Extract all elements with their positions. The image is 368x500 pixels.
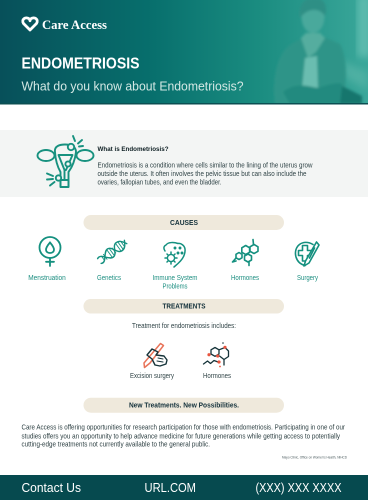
- icon: venus with drop: [40, 237, 60, 266]
- icon: uterus: [38, 136, 94, 187]
- logo: Care Access: Care Access: [42, 18, 107, 32]
- cause: surgery: [295, 242, 319, 282]
- closing paragraph: cutting-edge treatments not currently available to the general public.: [22, 441, 210, 449]
- contact label: Contact Us: [22, 481, 81, 495]
- causes heading pill: [84, 215, 284, 230]
- treatment: hormones: [203, 342, 231, 380]
- description: outside the uterus. It often involves the pelvic tissue but can also include the: [98, 170, 307, 178]
- cause: immune system problems: Immune System: [152, 275, 198, 282]
- cause: menstruation: [28, 237, 66, 282]
- photo: woman holding abdomen: [274, 0, 368, 104]
- cause: immune system problems: Problems: [162, 284, 188, 290]
- icon: hand holding scalpel: [144, 344, 167, 368]
- description: Endometriosis is a condition where cells similar to the lining of the uterus grow: [98, 162, 313, 170]
- icon: heart: [23, 18, 37, 30]
- url: URL.COM: [144, 481, 196, 495]
- treatments intro: Treatment for endometriosis includes:: [132, 322, 236, 330]
- treatment: excision surgery: [130, 344, 174, 380]
- closing paragraph: [22, 424, 346, 449]
- cause: surgery: Surgery: [297, 275, 318, 282]
- causes heading pill: CAUSES: [170, 220, 198, 227]
- title: ENDOMETRIOSIS: [22, 56, 140, 72]
- cause: hormones: [231, 240, 259, 282]
- panel: what is endometriosis: [0, 130, 368, 197]
- icon: molecule: [232, 240, 258, 266]
- footer: [0, 475, 368, 500]
- subtitle: What do you know about Endometriosis?: [22, 78, 244, 94]
- treatments heading pill: [84, 299, 284, 314]
- treatment: hormones: Hormones: [203, 373, 231, 380]
- cause: hormones: Hormones: [231, 275, 259, 282]
- icon: molecule with red dots: [204, 342, 228, 367]
- cause: menstruation: Menstruation: [28, 275, 66, 282]
- new treatments banner pill: New Treatments. New Possibilities.: [129, 401, 239, 410]
- icon: shield with virus: [164, 243, 185, 267]
- icon: dna helix: [96, 238, 129, 265]
- source note: Mayo Clinic, Office on Women's Health, NIHCD: [282, 456, 347, 460]
- icon: cross with scalpel: [295, 242, 319, 266]
- treatment: excision surgery: Excision surgery: [130, 373, 174, 380]
- new treatments banner pill: [84, 398, 284, 413]
- description: ovaries, fallopian tubes, and even the bladder.: [98, 178, 222, 186]
- header banner: [0, 0, 368, 104]
- description: [98, 162, 313, 186]
- cause: immune system problems: [152, 243, 198, 290]
- treatments heading pill: TREATMENTS: [162, 304, 206, 311]
- cause: genetics: Genetics: [97, 275, 121, 282]
- cause: genetics: [96, 238, 129, 282]
- heading: What is Endometriosis?: [98, 146, 168, 153]
- phone: (XXX) XXX XXXX: [256, 481, 342, 495]
